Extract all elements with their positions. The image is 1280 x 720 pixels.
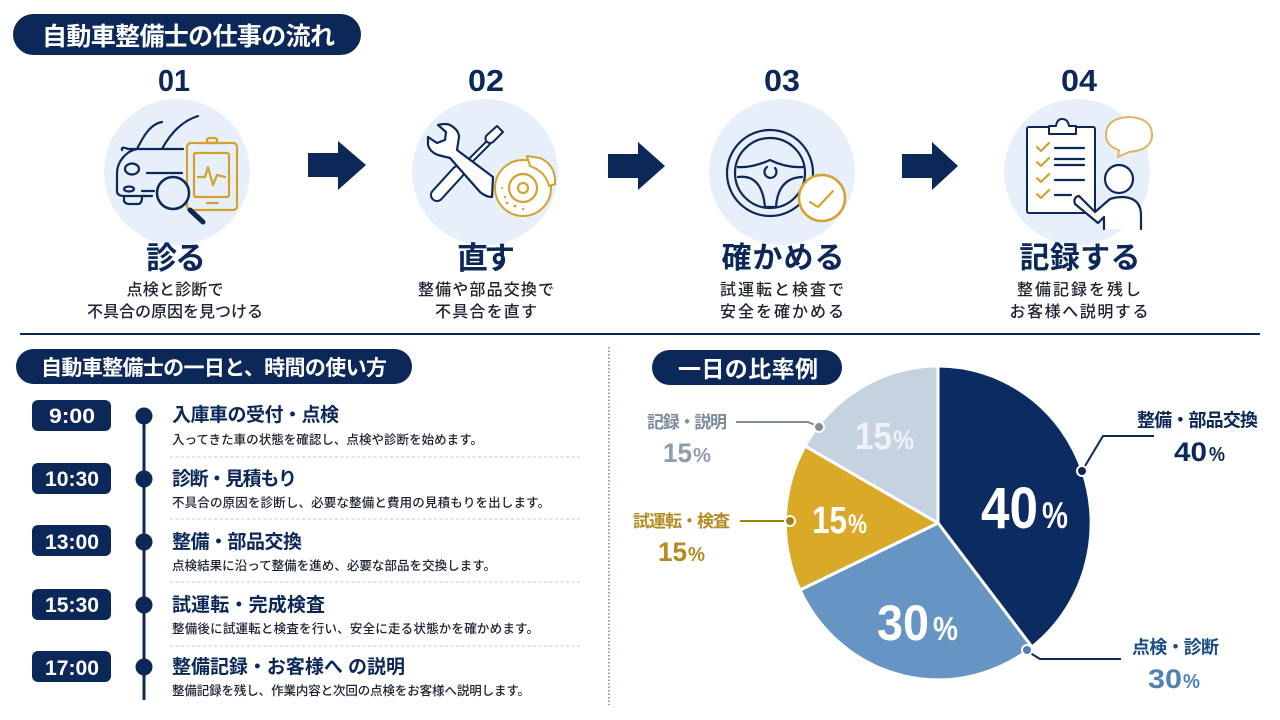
timeline item 17:00: 17:00: [45, 657, 99, 680]
callout: maintenance 40%: %: [1209, 444, 1225, 466]
step number 01: 01: [158, 63, 190, 98]
callout: inspection 30%: 点検・診断: [1132, 637, 1219, 657]
heading: daily ratio: 一日の比率例: [678, 356, 818, 382]
step number 02: 02: [468, 63, 504, 98]
timeline item 17:00: 整備記録を残し、作業内容と次回の点検をお客様へ説明します。: [172, 683, 530, 698]
step heading: 診る: [146, 241, 206, 276]
pie value 40%: 40: [981, 476, 1038, 541]
step description: 整備記録を残し: [1017, 280, 1141, 299]
step 04: record: [1004, 63, 1152, 321]
callout: test drive 15%: %: [688, 544, 705, 566]
timeline item 15:30: [32, 589, 539, 636]
callout: maintenance 40%: [1077, 410, 1258, 476]
icon: steering wheel with check: [709, 99, 855, 245]
pie value 15% gold: 15: [812, 500, 847, 542]
step description: [720, 281, 844, 321]
timeline item 10:30: 診断・見積もり: [172, 468, 297, 490]
callout: record 15%: [647, 413, 824, 468]
callout: maintenance 40%: 40: [1174, 437, 1207, 467]
step description: 点検と診断で: [126, 281, 224, 299]
callout: maintenance 40%: 整備・部品交換: [1137, 410, 1258, 430]
timeline item 13:00: [32, 525, 496, 573]
step 03: verify: [709, 63, 855, 321]
timeline item 9:00: 入ってきた車の状態を確認し、点検や診断を始めます。: [172, 432, 483, 447]
callout: inspection 30%: [1022, 637, 1219, 694]
callout: record 15%: 記録・説明: [647, 413, 727, 432]
timeline item 9:00: 入庫車の受付・点検: [172, 403, 339, 426]
arrow: step 3 to 4: [902, 142, 958, 190]
step heading: 確かめる: [722, 242, 844, 275]
step number 04: 04: [1061, 63, 1098, 98]
step 01: diagnose: [87, 63, 263, 321]
heading: day schedule: 自動車整備士の一日と、時間の使い方: [41, 357, 387, 380]
timeline item 17:00: 整備記録・お客様へ の説明: [172, 656, 405, 678]
callout: test drive 15%: 試運転・検査: [633, 512, 730, 531]
step 02: repair: [412, 63, 558, 321]
timeline item 15:30: 15:30: [45, 594, 99, 617]
timeline item 9:00: 9:00: [49, 405, 95, 428]
pie chart: daily ratio: [785, 366, 1091, 680]
timeline item 13:00: 13:00: [45, 531, 99, 554]
timeline item 13:00: 点検結果に沿って整備を進め、必要な部品を交換します。: [172, 558, 496, 573]
icon: tools and brake disc: [412, 99, 558, 245]
callout: inspection 30%: %: [1183, 671, 1200, 693]
step description: 試運転と検査で: [720, 281, 844, 299]
step number 03: 03: [764, 63, 800, 98]
heading: day schedule: [16, 349, 412, 384]
timeline item 15:30: 試運転・完成検査: [172, 593, 325, 616]
title: work flow: 自動車整備士の仕事の流れ: [42, 23, 335, 51]
timeline item 15:30: 整備後に試運転と検査を行い、安全に走る状態かを確かめます。: [172, 621, 539, 636]
title: work flow: [13, 14, 361, 55]
timeline item 17:00: [32, 651, 530, 698]
step description: [1010, 280, 1148, 321]
step description: 整備や部品交換で: [418, 281, 554, 299]
pie value 30%: %: [933, 610, 958, 647]
pie value 40%: %: [1042, 495, 1068, 536]
heading: daily ratio: [652, 350, 842, 385]
timeline item 10:30: 不具合の原因を診断し、必要な整備と費用の見積もりを出します。: [172, 495, 550, 510]
timeline item 10:30: 10:30: [45, 468, 99, 491]
step description: 安全を確かめる: [720, 303, 844, 321]
icon: clipboard and explaining person: [1004, 99, 1152, 245]
pie value 15% grey: 15: [855, 416, 892, 458]
step description: 不具合を直す: [435, 303, 537, 321]
timeline item 13:00: 整備・部品交換: [172, 530, 302, 553]
step description: お客様へ説明する: [1010, 303, 1148, 321]
step description: [418, 281, 554, 321]
step heading: 記録する: [1020, 242, 1140, 275]
callout: test drive 15%: 15: [658, 537, 687, 567]
step heading: 直す: [457, 241, 515, 276]
icon: car with diagnostic tablet: [104, 99, 250, 245]
pie value 15% gold: %: [848, 509, 867, 539]
callout: inspection 30%: 30: [1148, 664, 1182, 694]
pie value 30%: 30: [877, 595, 929, 651]
callout: record 15%: 15: [663, 438, 692, 468]
timeline item 9:00: [32, 400, 483, 447]
arrow: step 1 to 2: [308, 141, 366, 190]
callout: record 15%: %: [693, 445, 711, 467]
arrow: step 2 to 3: [608, 142, 665, 190]
step description: 不具合の原因を見つける: [87, 303, 263, 321]
timeline item 10:30: [32, 463, 550, 510]
callout: test drive 15%: [633, 512, 795, 567]
timeline: day schedule: [32, 400, 582, 700]
pie value 15% grey: %: [893, 425, 914, 455]
step description: [87, 281, 263, 321]
pie value 30%: [877, 595, 958, 651]
